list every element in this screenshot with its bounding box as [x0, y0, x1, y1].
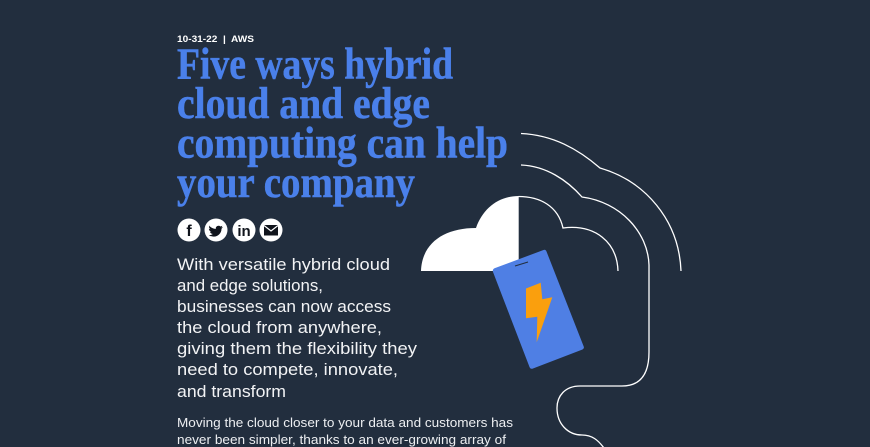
- title: cloud and edge: [177, 79, 430, 128]
- icon: linkedin: in: [237, 223, 251, 240]
- outer signal line: [521, 134, 681, 271]
- white half cloud: [421, 196, 519, 271]
- intro text block: With versatile hybrid cloud: [177, 256, 390, 274]
- body paragraph: [177, 416, 513, 447]
- phone: [493, 250, 584, 369]
- intro text block: need to compete, innovate,: [177, 361, 398, 379]
- title: [177, 40, 508, 207]
- icon: facebook: f: [186, 223, 192, 240]
- social share icons: [178, 218, 282, 242]
- phone speaker: [515, 262, 528, 266]
- date and source line: 10-31-22 | AWS: [177, 34, 254, 44]
- intro text block: businesses can now access: [177, 298, 391, 316]
- title: Five ways hybrid: [177, 40, 453, 88]
- title: your company: [177, 158, 415, 207]
- body paragraph: Moving the cloud closer to your data and customers has: [177, 416, 513, 430]
- intro text block: [177, 256, 418, 401]
- middle signal line running off the page: [521, 165, 649, 447]
- icon: email: [260, 218, 282, 242]
- icon: lightning bolt: [526, 283, 552, 342]
- icon: twitter: [204, 218, 228, 242]
- illustration: cloud, signal lines and phone: [421, 134, 681, 447]
- intro text block: giving them the flexibility they: [177, 340, 418, 358]
- intro text block: the cloud from anywhere,: [177, 319, 382, 337]
- title: computing can help: [177, 118, 508, 168]
- body paragraph: never been simpler, thanks to an ever-growing array of: [177, 433, 507, 447]
- intro text block: and transform: [177, 383, 286, 401]
- inner cloud outline: [518, 196, 618, 271]
- intro text block: and edge solutions,: [177, 277, 323, 295]
